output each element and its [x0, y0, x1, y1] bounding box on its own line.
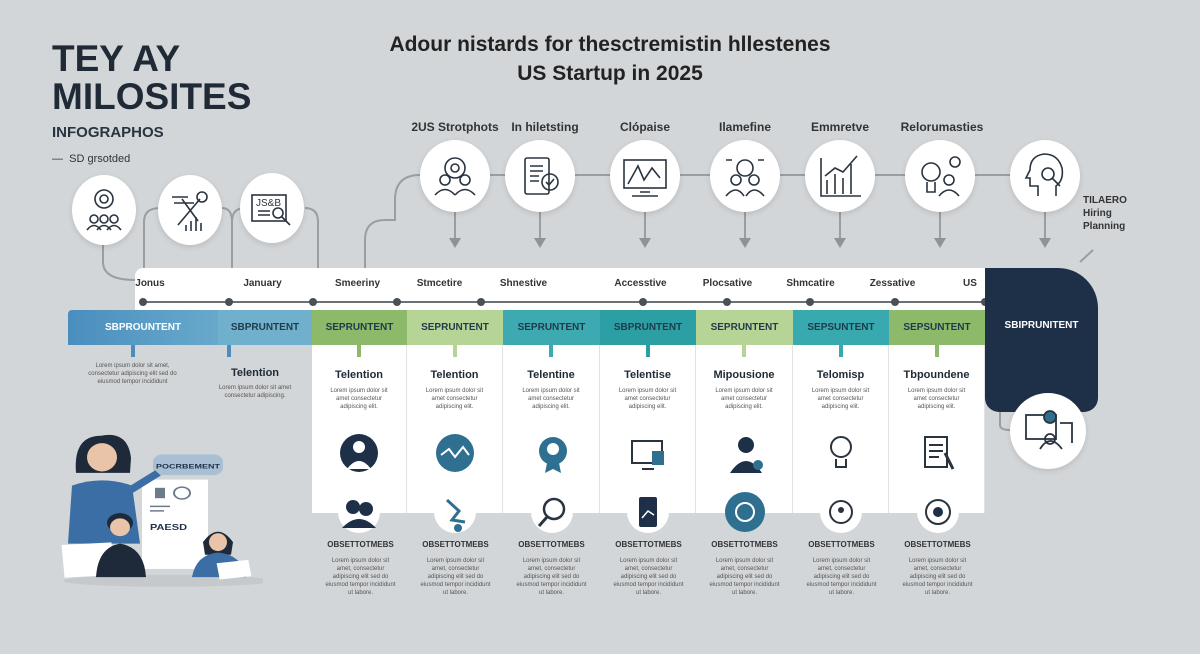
- text: Clópaise: [620, 120, 670, 134]
- side note: Hiring: [1083, 208, 1112, 219]
- text: Lorem ipsum dolor sit amet, consectetur adipiscing elit sed do eiusmod tempor incididunt ut labore.: [420, 558, 491, 596]
- navy final box: [985, 268, 1098, 412]
- columns: [312, 345, 407, 513]
- timeline strip: Plocsative: [703, 278, 752, 289]
- right circle icon: [1010, 393, 1086, 469]
- colored bar segments: SBPROUNTENT: [105, 322, 181, 333]
- text: Lorem ipsum dolor sit amet, consectetur adipiscing elit sed do eiusmod tempor incididunt ut labore.: [613, 558, 684, 596]
- timeline strip: Smeeriny: [335, 278, 380, 289]
- text: Lorem ipsum dolor sit amet, consectetur adipiscing elit sed do eiusmod tempor incididunt ut labore.: [806, 558, 877, 596]
- ticks: [131, 345, 135, 357]
- side note: [1083, 195, 1127, 232]
- top labels: 2US Strotphots: [411, 120, 499, 134]
- text: Telomisp: [817, 369, 864, 381]
- timeline strip: Stmcetire: [417, 278, 462, 289]
- text: JS&B: [256, 198, 281, 209]
- columns: Lorem ipsum dolor sit amet consectetur adipiscing elit.: [330, 388, 388, 410]
- objectives text: OBSETTOTMEBS: [327, 540, 394, 549]
- title left: TEY AY: [52, 38, 180, 79]
- text: Lorem ipsum dolor sit amet, consectetur adipiscing elit sed do eiusmod tempor incididunt ut labore.: [902, 558, 973, 596]
- timeline strip: [135, 268, 1045, 310]
- timeline strip: US: [963, 278, 977, 289]
- timeline strip: January: [243, 278, 282, 289]
- text: Lorem ipsum dolor sit amet, consectetur adipiscing elit sed do eiusmod tempor incididunt ut labore.: [709, 558, 780, 596]
- text: Lorem ipsum dolor sit amet consectetur adipiscing elit.: [619, 388, 676, 410]
- side note: TILAERO: [1083, 195, 1127, 206]
- timeline strip: Shmcatire: [786, 278, 835, 289]
- text: Lorem ipsum dolor sit amet consectetur adipiscing elit.: [426, 388, 483, 410]
- text: Telentine: [527, 369, 575, 381]
- text: SEPRUNTENT: [326, 322, 393, 333]
- text: SEPSUNTENT: [807, 322, 875, 333]
- text: SEPRUNTENT: [421, 322, 489, 333]
- timeline strip: Accesstive: [614, 278, 667, 289]
- text: Lorem ipsum dolor sit amet consectetur adipiscing elit.: [715, 388, 773, 410]
- colored bar segments: [68, 310, 218, 345]
- text: SBPRUNTENT: [231, 322, 299, 333]
- text: Lorem ipsum dolor sit amet consectetur adipiscing elit.: [522, 388, 580, 410]
- lower icons: [338, 492, 959, 533]
- navy final box: SBIPRUNITENT: [1005, 320, 1078, 331]
- text: Telention: [231, 367, 279, 379]
- columns: Telention: [335, 369, 383, 381]
- title left: — SD grsotded: [52, 153, 130, 165]
- text: Telention: [430, 369, 479, 381]
- left texts: Lorem ipsum dolor sit amet, consectetur adipiscing elit sed do eiusmod tempor incididunt: [88, 363, 177, 385]
- text: SBPRUNTENT: [614, 322, 682, 333]
- text: Lorem ipsum dolor sit amet, consectetur adipiscing elit sed do eiusmod tempor incididunt ut labore.: [325, 558, 396, 596]
- text: In hiletsting: [511, 120, 579, 134]
- icon circles row 1: [72, 175, 136, 245]
- illustration: people: POCRBEMENT: [156, 463, 220, 470]
- main title: Adour nistards for thesctremistin hllestenes: [389, 33, 831, 56]
- main title: US Startup in 2025: [517, 62, 703, 85]
- text: Relorumasties: [901, 120, 983, 134]
- text: Lorem ipsum dolor sit amet consectetur adipiscing elit.: [908, 388, 965, 410]
- timeline strip: Shnestive: [500, 278, 547, 289]
- text: SEPSUNTENT: [903, 322, 971, 333]
- text: OBSETTOTMEBS: [615, 540, 682, 549]
- text: Telentise: [624, 369, 671, 381]
- title left: [52, 38, 251, 165]
- illustration: people: [62, 434, 263, 586]
- main title: [389, 33, 831, 85]
- text: SEPRUNTENT: [518, 322, 585, 333]
- text: OBSETTOTMEBS: [904, 540, 971, 549]
- text: Tbpoundene: [904, 369, 970, 381]
- illustration: people: PAESD: [150, 523, 187, 533]
- text: OBSETTOTMEBS: [711, 540, 778, 549]
- title left: MILOSITES: [52, 76, 251, 117]
- text: OBSETTOTMEBS: [422, 540, 489, 549]
- text: Lorem ipsum dolor sit amet, consectetur adipiscing elit sed do eiusmod tempor incididunt ut labore.: [516, 558, 587, 596]
- text: Emmretve: [811, 120, 869, 134]
- title left: INFOGRAPHOS: [52, 124, 164, 141]
- text: Lorem ipsum dolor sit amet consectetur adipiscing.: [219, 385, 291, 399]
- icon circles row 2: [420, 140, 490, 212]
- timeline strip: Zessative: [870, 278, 915, 289]
- text: Ilamefine: [719, 120, 771, 134]
- text: OBSETTOTMEBS: [808, 540, 875, 549]
- side note: Planning: [1083, 221, 1125, 232]
- timeline strip: Jonus: [135, 278, 165, 289]
- text: SEPRUNTENT: [711, 322, 778, 333]
- text: Lorem ipsum dolor sit amet consectetur adipiscing elit.: [812, 388, 869, 410]
- text: Mipousione: [713, 369, 775, 381]
- text: OBSETTOTMEBS: [518, 540, 585, 549]
